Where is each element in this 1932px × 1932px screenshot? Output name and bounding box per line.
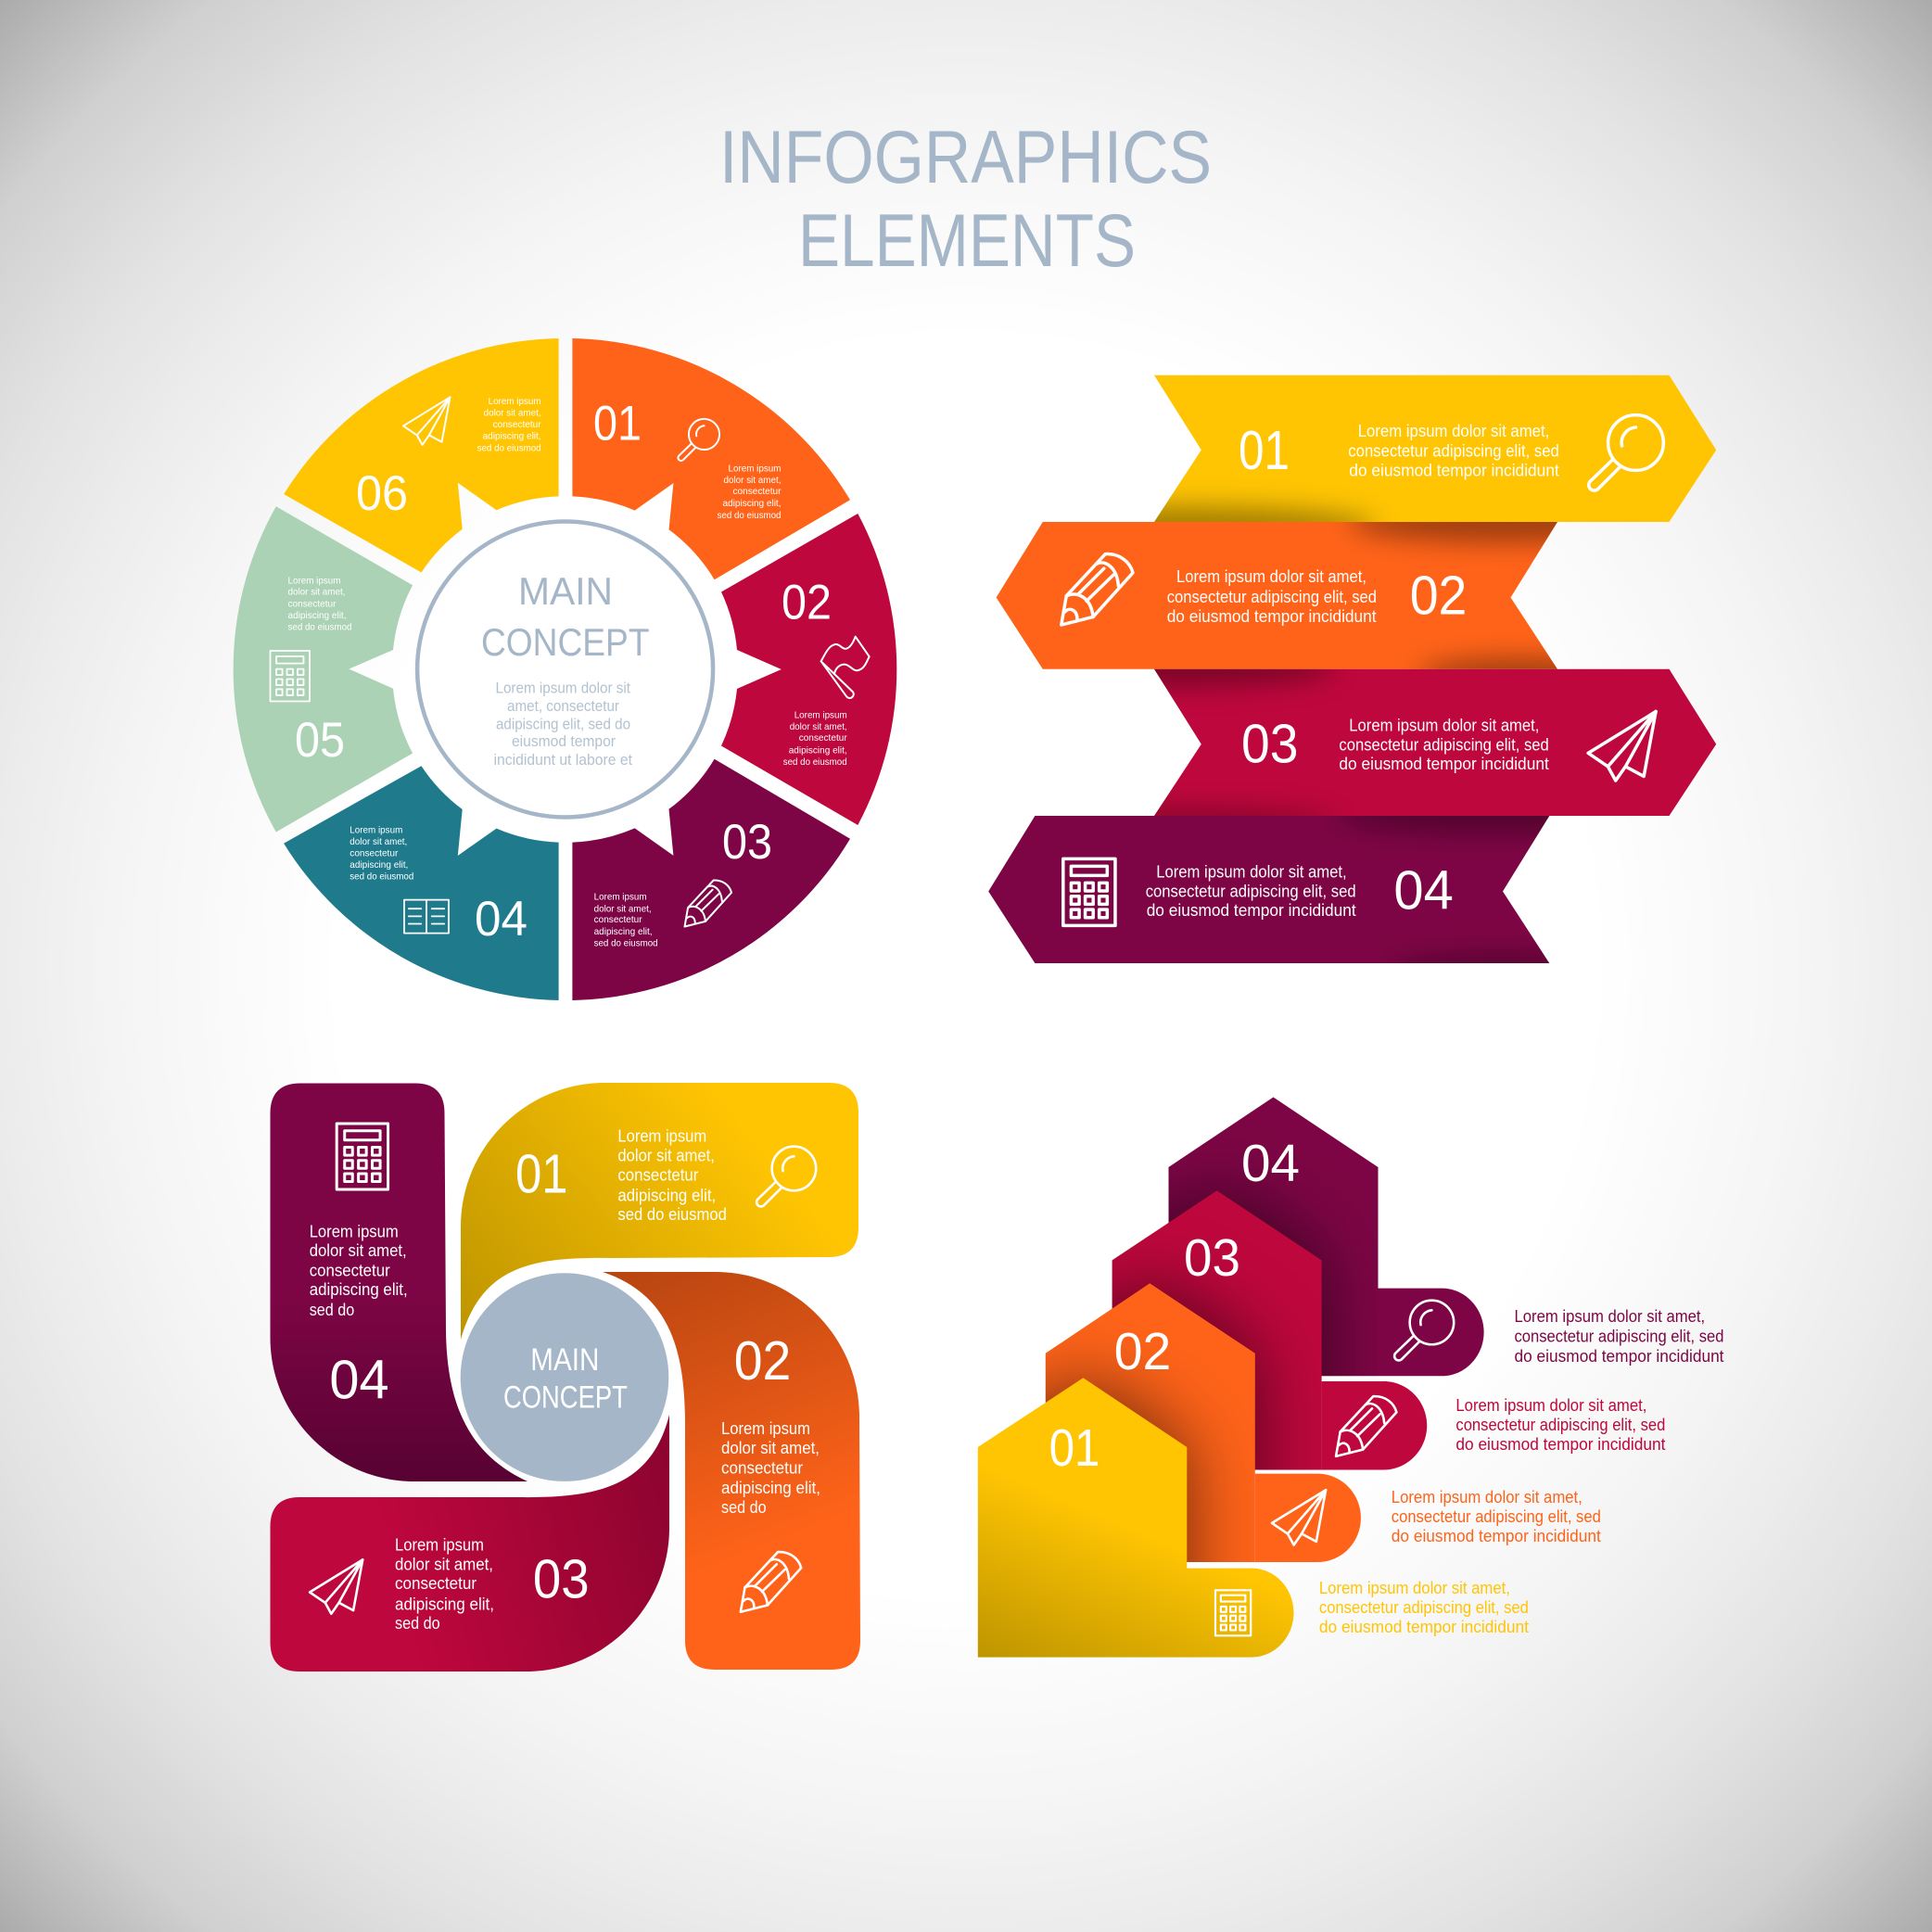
swirl petal 03: Lorem ipsum	[395, 1536, 484, 1555]
caption 03: do eiusmod tempor incididunt	[1455, 1435, 1665, 1454]
text: segment 02: consectetur	[799, 732, 847, 744]
banner 01: do eiusmod tempor incididunt	[1349, 462, 1559, 480]
swirl petal 03: adipiscing elit,	[395, 1595, 494, 1613]
icon: calculator	[271, 651, 310, 701]
caption 02: do eiusmod tempor incididunt	[1392, 1527, 1601, 1545]
swirl petal 04	[271, 1083, 527, 1481]
title	[719, 116, 1212, 283]
banner 02: Lorem ipsum dolor sit amet,	[1176, 567, 1366, 586]
title: ELEMENTS	[798, 199, 1136, 283]
panel: stacked house arrows	[977, 1098, 1724, 1658]
banner 04: do eiusmod tempor incididunt	[1147, 901, 1356, 920]
banner 02: do eiusmod tempor incididunt	[1167, 607, 1377, 626]
house 02	[1046, 1283, 1361, 1562]
icon: magnifier	[678, 419, 719, 461]
text: segment 06: adipiscing elit,	[483, 431, 541, 442]
text: segment 06	[477, 396, 541, 453]
banner 02	[996, 522, 1557, 669]
centre paragraph: incididunt ut labore et	[493, 751, 632, 769]
swirl petal 01: 01	[515, 1144, 568, 1205]
icon: flag	[821, 637, 870, 698]
banner 03: do eiusmod tempor incididunt	[1339, 755, 1549, 773]
caption 02: consectetur adipiscing elit, sed	[1392, 1507, 1601, 1526]
caption 02	[1392, 1488, 1601, 1545]
swirl petal 01: dolor sit amet,	[617, 1146, 715, 1164]
text: segment 02: sed do eiusmod	[783, 756, 847, 768]
swirl petal 01: consectetur	[617, 1166, 698, 1185]
caption 04: do eiusmod tempor incididunt	[1515, 1347, 1724, 1366]
house 03	[1112, 1190, 1428, 1470]
text: segment 06: Lorem ipsum	[489, 396, 541, 407]
text: segment 02: Lorem ipsum	[794, 710, 847, 721]
caption 03	[1455, 1396, 1665, 1454]
text: segment 01: dolor sit amet,	[723, 475, 781, 486]
text: segment 03: Lorem ipsum	[594, 892, 647, 903]
banner 04	[988, 816, 1550, 963]
banner 03: 03	[1241, 713, 1298, 774]
text: segment 06: dolor sit amet,	[484, 408, 541, 419]
title: INFOGRAPHICS	[719, 116, 1212, 199]
centre paragraph: Lorem ipsum dolor sit	[495, 680, 630, 697]
swirl petal 04: sed do	[310, 1301, 354, 1319]
text: segment 04	[350, 825, 413, 883]
numbers: 03	[722, 815, 772, 870]
text: segment 02	[783, 710, 847, 768]
icon: paper plane	[403, 397, 450, 445]
banner 01: consectetur adipiscing elit, sed	[1348, 442, 1559, 461]
centre heading: main concept: MAIN	[518, 569, 613, 613]
swirl petal 02: consectetur	[721, 1458, 803, 1477]
banner 02: 02	[1410, 566, 1467, 627]
centre circle: main concept: MAIN	[530, 1342, 599, 1378]
segment 06	[284, 338, 559, 573]
caption 03: consectetur adipiscing elit, sed	[1455, 1416, 1665, 1434]
centre heading: main concept	[481, 569, 649, 664]
text: segment 01: adipiscing elit,	[723, 498, 781, 509]
text: segment 03	[594, 892, 658, 949]
centre circle: main concept	[461, 1273, 668, 1481]
centre circle: main concept: CONCEPT	[503, 1380, 628, 1416]
house 02: 02	[1114, 1322, 1171, 1381]
banner 01	[1154, 375, 1717, 522]
centre ring	[417, 521, 713, 818]
text: segment 05	[287, 575, 352, 632]
swirl petal 02: dolor sit amet,	[721, 1439, 820, 1457]
centre paragraph	[493, 680, 632, 769]
banner 01: 01	[1239, 420, 1290, 481]
text: segment 03: dolor sit amet,	[594, 903, 652, 914]
banner 04: 04	[1393, 860, 1454, 922]
swirl petal 01: Lorem ipsum	[617, 1127, 706, 1146]
swirl petal 03: 03	[533, 1549, 590, 1610]
text: segment 02: dolor sit amet,	[790, 721, 847, 732]
text: segment 04: sed do eiusmod	[350, 871, 413, 883]
centre paragraph: amet, consectetur	[507, 697, 619, 715]
segment 03	[572, 759, 850, 1000]
house 01: 01	[1049, 1418, 1099, 1478]
panel: swirl diagram	[271, 1083, 860, 1671]
banner 04: Lorem ipsum dolor sit amet,	[1156, 862, 1347, 881]
banner 01: Lorem ipsum dolor sit amet,	[1358, 422, 1549, 440]
swirl petal 04: consectetur	[310, 1261, 390, 1279]
caption 01	[1319, 1579, 1529, 1636]
banner 03: consectetur adipiscing elit, sed	[1339, 735, 1549, 754]
swirl petal 03: consectetur	[395, 1574, 477, 1593]
numbers: 01	[593, 397, 642, 451]
caption 04	[1515, 1307, 1724, 1366]
numbers: 02	[782, 575, 832, 630]
caption 01: consectetur adipiscing elit, sed	[1319, 1598, 1529, 1617]
text: segment 05: dolor sit amet,	[287, 587, 345, 598]
text: segment 03: sed do eiusmod	[594, 938, 658, 949]
house 04: 04	[1241, 1134, 1300, 1193]
banner 02: consectetur adipiscing elit, sed	[1167, 588, 1377, 606]
swirl petal 03	[271, 1415, 669, 1671]
numbers: 04	[475, 892, 527, 947]
swirl petal 03: dolor sit amet,	[395, 1555, 493, 1573]
banner 04: consectetur adipiscing elit, sed	[1146, 883, 1356, 901]
swirl petal 02: sed do	[721, 1498, 767, 1517]
swirl petal 04: Lorem ipsum	[310, 1222, 399, 1240]
caption 04: consectetur adipiscing elit, sed	[1515, 1328, 1724, 1346]
swirl petal 04: adipiscing elit,	[310, 1280, 408, 1299]
text: segment 05: adipiscing elit,	[287, 610, 347, 621]
swirl petal 01	[461, 1083, 858, 1340]
caption 02: Lorem ipsum dolor sit amet,	[1392, 1488, 1582, 1506]
text: segment 01: consectetur	[732, 486, 782, 497]
centre paragraph: adipiscing elit, sed do	[496, 716, 630, 732]
text: segment 01	[718, 464, 782, 521]
text: segment 01: sed do eiusmod	[718, 510, 782, 521]
text: segment 04: consectetur	[350, 847, 399, 858]
text: segment 05: sed do eiusmod	[287, 621, 352, 632]
text: segment 04: dolor sit amet,	[350, 836, 407, 847]
text: segment 02: adipiscing elit,	[789, 745, 847, 756]
numbers: 06	[356, 466, 408, 521]
banner 03	[1154, 669, 1717, 816]
text: segment 01: Lorem ipsum	[729, 464, 782, 475]
swirl petal 04: dolor sit amet,	[310, 1241, 407, 1260]
text: segment 06: sed do eiusmod	[477, 442, 541, 453]
centre heading: main concept: CONCEPT	[481, 620, 649, 664]
caption 04: Lorem ipsum dolor sit amet,	[1515, 1307, 1705, 1326]
icon: pencil	[685, 880, 731, 926]
swirl petal 02	[603, 1272, 860, 1670]
swirl petal 01: sed do eiusmod	[617, 1205, 727, 1224]
centre paragraph: eiusmod tempor	[512, 732, 616, 750]
caption 01: do eiusmod tempor incididunt	[1319, 1618, 1529, 1636]
swirl petal 02: 02	[734, 1330, 791, 1392]
segment 04	[284, 766, 559, 1000]
text: segment 06: consectetur	[493, 419, 541, 430]
swirl petal 04: 04	[329, 1350, 389, 1411]
text: segment 05: consectetur	[287, 598, 337, 609]
segment 02	[721, 514, 896, 825]
text: segment 05: Lorem ipsum	[287, 575, 341, 586]
text: segment 04: Lorem ipsum	[350, 825, 403, 836]
icon: book	[404, 900, 449, 934]
text: segment 03: consectetur	[594, 914, 642, 925]
swirl petal 02: Lorem ipsum	[721, 1419, 810, 1438]
text: segment 04: adipiscing elit,	[350, 859, 408, 871]
segment 05	[234, 506, 413, 833]
caption 03: Lorem ipsum dolor sit amet,	[1455, 1396, 1646, 1415]
banner 03: Lorem ipsum dolor sit amet,	[1349, 716, 1539, 734]
house 03: 03	[1184, 1228, 1240, 1288]
numbers	[295, 397, 832, 947]
numbers: 05	[295, 713, 345, 768]
panel: segmented circle diagram	[234, 338, 896, 1000]
segment 01	[572, 338, 850, 579]
caption 01: Lorem ipsum dolor sit amet,	[1319, 1579, 1510, 1597]
swirl petal 01: adipiscing elit,	[617, 1186, 716, 1204]
text: segment 03: adipiscing elit,	[594, 926, 653, 937]
house 04	[1168, 1098, 1484, 1376]
swirl petal 03: sed do	[395, 1614, 440, 1633]
swirl petal 02: adipiscing elit,	[721, 1479, 820, 1497]
house 01	[978, 1378, 1294, 1658]
panel: arrow banners	[987, 375, 1716, 982]
